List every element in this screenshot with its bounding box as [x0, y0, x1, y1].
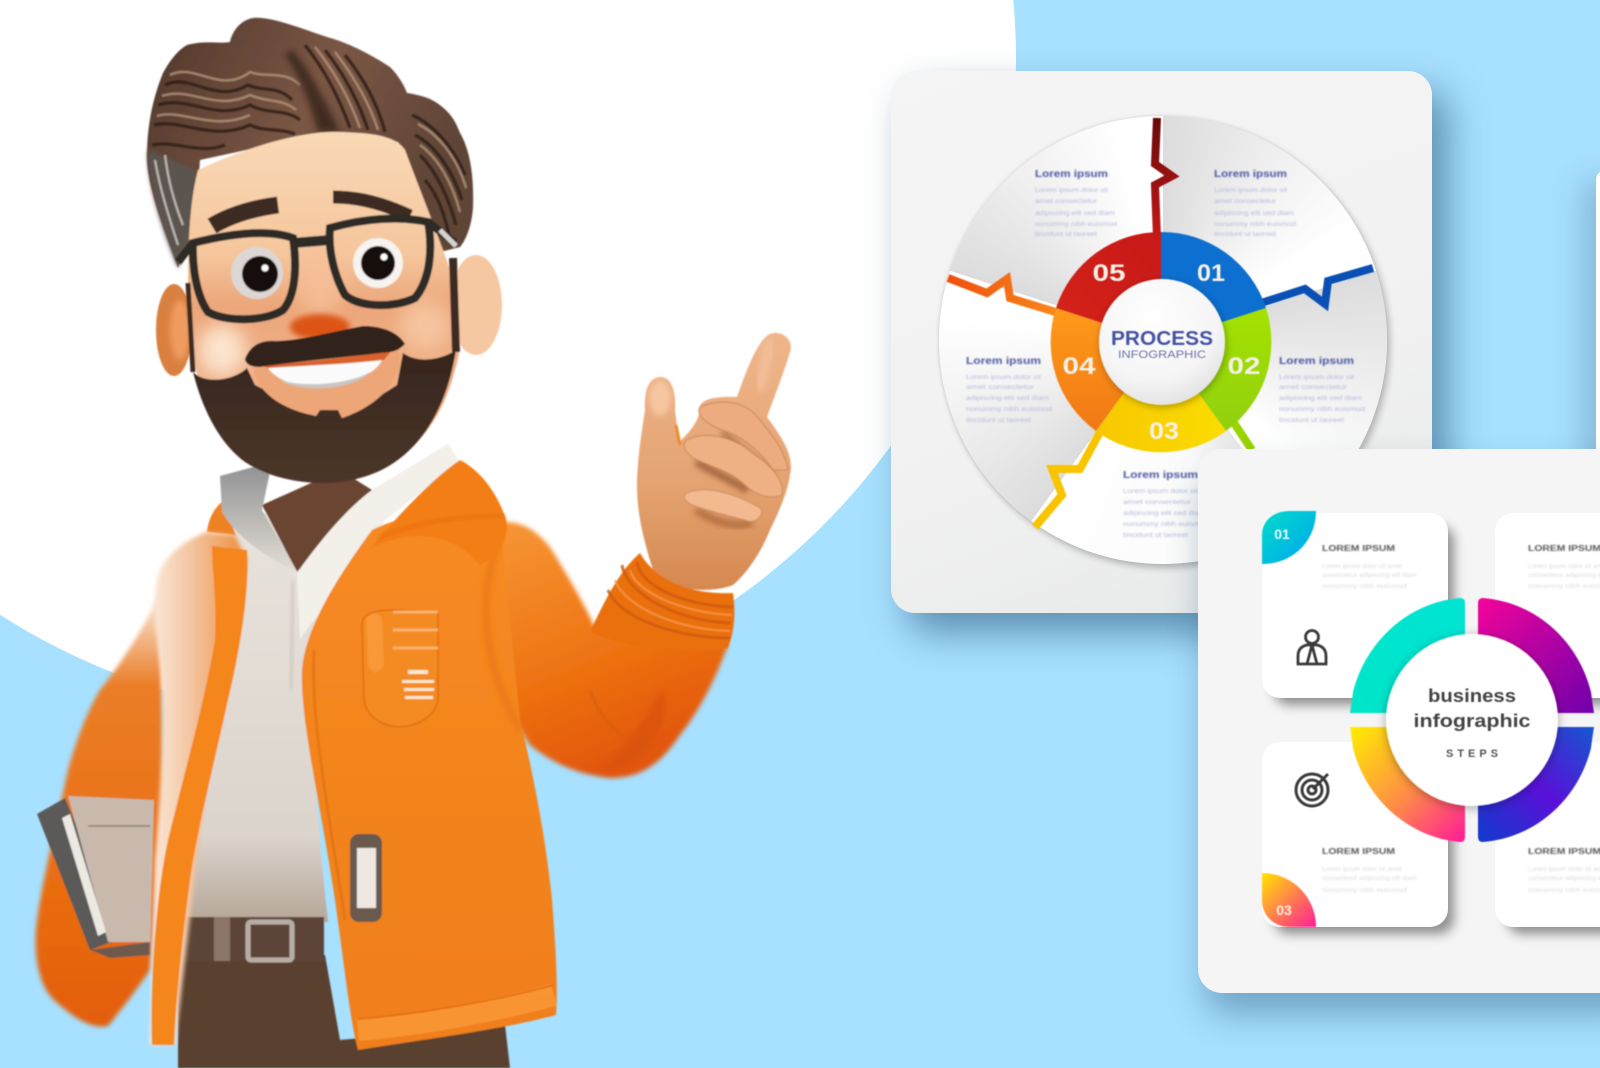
text block: right: Lorem ipsum dolor sit	[1279, 374, 1354, 381]
text block: right: amet consectetur	[1279, 384, 1348, 391]
text block: right: adipiscing elit sed diam	[1279, 395, 1362, 402]
character: bearded man in orange jacket	[32, 16, 792, 1068]
card text 01: consectetur adipiscing elit diam	[1322, 573, 1417, 579]
hood	[370, 460, 507, 565]
card text 02: LOREM IPSUM	[1528, 544, 1600, 553]
moustache	[245, 326, 405, 367]
ring numbers: 03	[1149, 418, 1179, 445]
neck	[262, 470, 372, 572]
mouth	[253, 348, 400, 418]
card 04	[1495, 742, 1600, 927]
card text 04	[1528, 847, 1600, 894]
cuff with ribs	[590, 553, 734, 651]
card text 01: nonummy nibh euismod	[1322, 584, 1407, 590]
card text 03: LOREM IPSUM	[1322, 847, 1395, 856]
left jacket front panel	[150, 532, 247, 1045]
badge 03	[1262, 873, 1316, 927]
icon: person	[1298, 630, 1326, 664]
glasses	[178, 219, 455, 319]
nose tip	[290, 314, 350, 340]
shirt collars	[220, 444, 460, 640]
icon: target	[1296, 774, 1328, 806]
book under arm	[37, 796, 154, 958]
card text 01: LOREM IPSUM	[1322, 544, 1395, 553]
badge 03: 03	[1276, 902, 1292, 918]
text block: bottom: amet consectetur	[1123, 499, 1192, 506]
pants	[178, 955, 510, 1068]
card text 04: LOREM IPSUM	[1528, 847, 1600, 856]
ring numbers: 01	[1197, 260, 1225, 287]
card text 03: Lorem ipsum dolor sit amet	[1322, 867, 1402, 873]
white background blob	[0, 0, 1016, 719]
text block: right: Lorem ipsum	[1279, 356, 1354, 367]
text block: top left: Lorem ipsum	[1035, 169, 1108, 180]
panel: right edge third card	[1596, 170, 1600, 470]
text block: bottom: tincidunt ut laoreet	[1123, 532, 1188, 539]
glasses hinge	[440, 230, 456, 246]
text block: top right: Lorem ipsum dolor sit	[1214, 187, 1287, 194]
text block: left: Lorem ipsum dolor sit	[966, 374, 1041, 381]
ears	[156, 255, 502, 376]
right jacket body	[302, 513, 557, 1050]
jagged connector lines	[948, 118, 1373, 527]
text block: top right	[1214, 169, 1296, 238]
text block: bottom	[1123, 470, 1209, 539]
text block: top left: Lorem ipsum dolor sit	[1035, 187, 1108, 194]
face	[188, 132, 460, 481]
text block: right: nonummy nibh euismod	[1279, 406, 1365, 413]
text block: left: Lorem ipsum	[966, 356, 1041, 367]
card 03	[1262, 742, 1448, 927]
ring segments	[1051, 232, 1271, 452]
centre hub: infographic	[1414, 711, 1530, 731]
ring numbers: 04	[1062, 353, 1096, 380]
process disc with shaded wedges	[939, 116, 1387, 564]
text block: top left	[1035, 169, 1117, 238]
shirt placket	[290, 580, 294, 690]
text block: right: tincidunt ut laoreet	[1279, 417, 1344, 424]
badge 01: 01	[1274, 526, 1290, 542]
eyebrows	[212, 197, 410, 226]
jacket collar back	[207, 502, 236, 535]
centre hub	[1386, 634, 1558, 806]
text block: left	[966, 356, 1052, 424]
shirt	[180, 490, 395, 922]
card 02	[1495, 513, 1600, 698]
badge 01	[1262, 511, 1316, 564]
belt and buckle	[178, 917, 324, 961]
card text 04: Lorem ipsum dolor sit amet	[1528, 867, 1600, 873]
text block: top right: tincidunt ut laoreet	[1214, 231, 1276, 238]
ring numbers: 02	[1228, 353, 1260, 380]
text block: top left: adipiscing elit sed diam	[1035, 210, 1115, 217]
centre hub: PROCESS	[1111, 328, 1213, 350]
ring numbers: 05	[1092, 260, 1126, 287]
process wheel	[946, 117, 1375, 539]
text block: top right: amet consectetur	[1214, 198, 1277, 205]
cheek shading	[193, 274, 452, 380]
right arm sleeve	[478, 522, 728, 778]
card text 03	[1322, 847, 1417, 894]
text block: top right: adipiscing elit sed diam	[1214, 210, 1294, 217]
card text 03: consectetur adipiscing elit diam	[1322, 876, 1417, 882]
left sleeve	[36, 590, 164, 1027]
left jacket strip	[152, 546, 248, 1045]
centre hub	[1099, 279, 1225, 405]
panel: process infographic	[891, 71, 1432, 613]
card text 01: Lorem ipsum dolor sit amet	[1322, 564, 1402, 570]
business ring and card contents	[1261, 510, 1600, 928]
sideburns	[188, 258, 456, 372]
centre hub: business	[1428, 686, 1516, 706]
card text 01	[1322, 544, 1417, 590]
card text 02: nonummy nibh euismod	[1528, 584, 1600, 590]
centre hub: STEPS	[1446, 748, 1498, 760]
card 01	[1262, 513, 1448, 698]
panel: business infographic	[1198, 449, 1600, 993]
text block: left: amet consectetur	[966, 384, 1035, 391]
text block: top left: tincidunt ut laoreet	[1035, 231, 1097, 238]
ring segment: blue violet	[1478, 727, 1594, 842]
hair	[147, 18, 473, 268]
text block: left: tincidunt ut laoreet	[966, 417, 1031, 424]
text block: bottom: nonummy nibh euismod	[1123, 521, 1209, 528]
ring segment: yellow pink	[1350, 727, 1465, 842]
text block: left: nonummy nibh euismod	[966, 406, 1052, 413]
card text 02: Lorem ipsum dolor sit amet	[1528, 564, 1600, 570]
card text 02	[1528, 544, 1600, 590]
text block: top left: nonummy nibh euismod	[1035, 221, 1117, 228]
beard	[193, 350, 456, 483]
ring segment: teal	[1350, 598, 1465, 713]
card text 03: nonummy nibh euismod	[1322, 888, 1407, 894]
text block: left: adipiscing elit sed diam	[966, 395, 1049, 402]
text block: top right: nonummy nibh euismod	[1214, 221, 1296, 228]
text block: top left: amet consectetur	[1035, 198, 1098, 205]
text block: bottom: adipiscing elit sed diam	[1123, 510, 1206, 517]
chest pocket	[362, 610, 438, 727]
text block: top right: Lorem ipsum	[1214, 169, 1287, 180]
centre hub: INFOGRAPHIC	[1118, 349, 1206, 361]
text block: right	[1279, 356, 1365, 424]
text block: bottom: Lorem ipsum	[1123, 470, 1198, 481]
card text 04: nonummy nibh euismod	[1528, 888, 1600, 894]
ring numbers	[1062, 260, 1260, 445]
ring segment: magenta	[1478, 598, 1594, 713]
eyes	[231, 238, 403, 299]
text block: bottom: Lorem ipsum dolor sit	[1123, 488, 1198, 495]
hand	[637, 333, 791, 590]
jacket clip	[350, 834, 382, 922]
